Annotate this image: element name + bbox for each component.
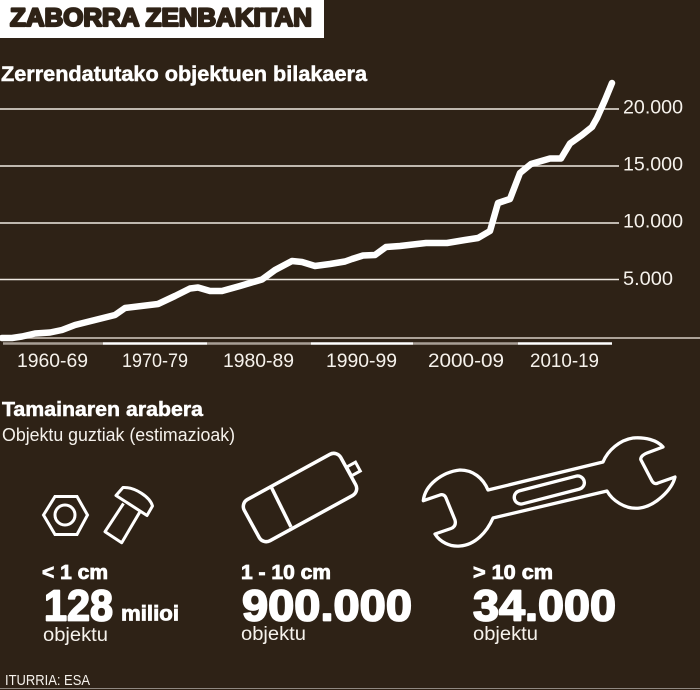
title: ZABORRA ZENBAKITAN	[10, 4, 312, 32]
icon: wrench	[423, 438, 675, 546]
column: large objects: objektu	[473, 623, 538, 645]
subheading: Objektu guztiak (estimazioak)	[2, 424, 235, 445]
y axis labels: 10.000	[623, 210, 683, 232]
decade labels	[17, 351, 599, 372]
decade labels: 1970-79	[122, 351, 188, 372]
column: small objects: milioi	[121, 602, 179, 626]
column: large objects: 34.000	[473, 582, 616, 630]
column: medium objects: 1 - 10 cm	[241, 562, 331, 584]
column: large objects	[473, 562, 616, 645]
y axis labels: 15.000	[623, 154, 683, 176]
column: small objects: objektu	[43, 624, 108, 646]
y axis labels: 5.000	[623, 268, 673, 290]
column: small objects: < 1 cm	[42, 562, 108, 584]
column: medium objects: objektu	[241, 623, 306, 645]
title	[0, 0, 324, 38]
icon: battery	[240, 450, 360, 545]
heading: chart: Zerrendatutako objektuen bilakaera	[1, 63, 367, 86]
decade labels: 1990-99	[326, 351, 397, 372]
decade labels: 2000-09	[428, 351, 504, 372]
source: ITURRIA: ESA	[5, 672, 90, 689]
column: large objects: > 10 cm	[473, 562, 553, 584]
heading: size: Tamainaren arabera	[2, 399, 204, 421]
line chart	[0, 83, 700, 372]
decade bars	[3, 342, 612, 345]
decade labels: 1980-89	[223, 351, 294, 372]
decade labels: 1960-69	[17, 351, 88, 372]
column: small objects: 128	[44, 582, 113, 630]
y axis labels	[623, 96, 683, 290]
column: small objects	[42, 562, 179, 646]
y axis labels: 20.000	[623, 96, 683, 118]
decade labels: 2010-19	[530, 351, 599, 372]
column: medium objects	[241, 562, 412, 645]
icon: nut	[44, 496, 88, 534]
column: medium objects: 900.000	[242, 582, 412, 630]
data line	[2, 83, 612, 338]
icon: bolt	[105, 487, 152, 543]
